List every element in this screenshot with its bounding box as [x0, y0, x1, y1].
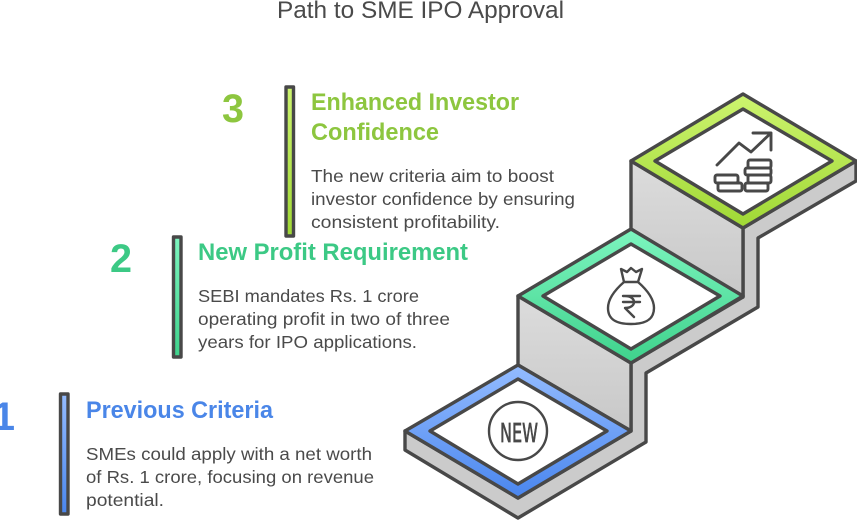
step 3 description: consistent profitability. — [311, 212, 500, 232]
step 3 bar — [286, 87, 294, 236]
step 3 text — [311, 89, 575, 232]
step 2 description: years for IPO applications. — [198, 332, 417, 352]
step 2 bar — [174, 237, 181, 357]
step 3 left face — [631, 161, 743, 297]
step 2 top: green diamond — [518, 229, 743, 363]
step 3 heading: Enhanced Investor — [311, 89, 519, 116]
icon: new badge — [489, 402, 547, 460]
step 2 description: operating profit in two of three — [198, 309, 450, 329]
step 1 heading: Previous Criteria — [86, 397, 274, 424]
continuous right side strip — [405, 161, 856, 518]
icon: rupee money bag — [608, 268, 654, 324]
step 3 number: 3 — [222, 87, 244, 131]
step 1 description: SMEs could apply with a net worth — [86, 444, 372, 464]
step 2 heading: New Profit Requirement — [198, 239, 468, 266]
step 3 heading: Confidence — [311, 119, 439, 146]
step 3 description: The new criteria aim to boost — [311, 166, 554, 186]
step 2 left face — [518, 296, 631, 431]
step 1 text — [86, 397, 374, 510]
isometric staircase — [405, 94, 856, 518]
step 1 description: of Rs. 1 crore, focusing on revenue — [86, 467, 374, 487]
step 2 number: 2 — [110, 237, 132, 281]
step 3 top: lime diamond — [631, 94, 856, 228]
step 2 text — [198, 239, 468, 352]
step 1 description: potential. — [86, 490, 164, 510]
step 1 bar — [60, 394, 68, 514]
step 2 description: SEBI mandates Rs. 1 crore — [198, 286, 419, 306]
step 1 top: blue diamond — [405, 365, 631, 498]
icon: growth chart and coins — [715, 133, 771, 191]
icon: new badge: NEW — [500, 419, 538, 449]
step 3 description: investor confidence by ensuring — [311, 189, 575, 209]
